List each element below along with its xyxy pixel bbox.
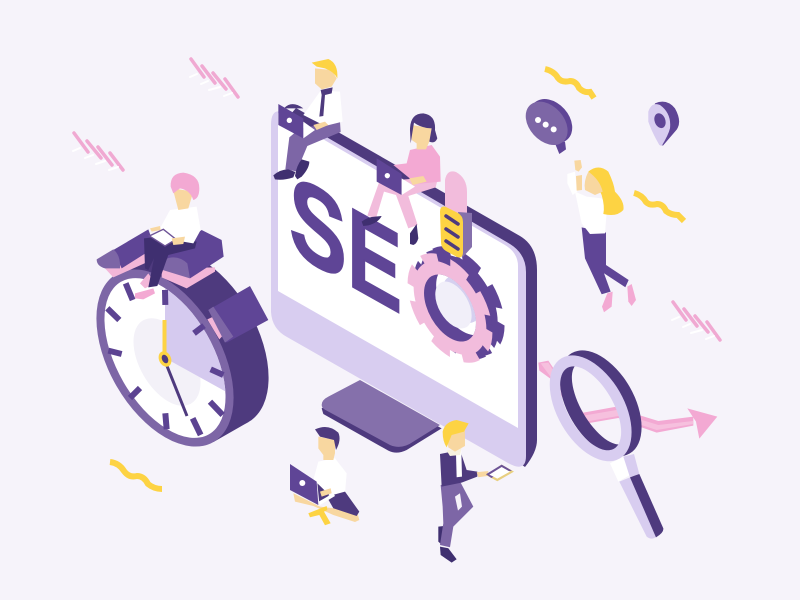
face (315, 68, 337, 89)
decoration: yellow squiggle top (545, 69, 594, 98)
shirt strip (456, 450, 462, 477)
hair (410, 113, 437, 143)
padlock stripes (446, 216, 458, 249)
tablet (486, 465, 514, 481)
monitor screen (278, 113, 518, 428)
person: man sitting cross-legged with laptop (290, 427, 359, 525)
legs (144, 237, 197, 287)
trousers (582, 227, 629, 294)
pin front (648, 104, 670, 146)
face (585, 172, 603, 195)
gear back (414, 230, 500, 378)
face (318, 437, 335, 460)
collar and tie (319, 87, 333, 117)
magnifier front rim (533, 341, 649, 475)
stopwatch rim (68, 246, 262, 470)
shirt (313, 458, 347, 497)
stopwatch (96, 229, 269, 446)
bubble front (517, 93, 576, 153)
collar (447, 447, 462, 456)
neck and face (412, 125, 432, 149)
gear as letter O (408, 246, 505, 363)
legs (367, 178, 437, 228)
hair (171, 173, 199, 200)
hair (312, 59, 337, 78)
laptop (278, 104, 303, 138)
shoe (440, 547, 457, 563)
laptop (290, 464, 318, 505)
person: blond man standing with tablet (438, 420, 514, 563)
arrow head (687, 408, 717, 439)
shoes (627, 284, 636, 306)
pin hole (652, 112, 668, 130)
shoes (273, 169, 295, 180)
hand (320, 488, 332, 497)
pale centre shadow (120, 307, 214, 417)
hand (477, 471, 488, 477)
decoration: pink dashes top (190, 59, 238, 97)
person: blond man with laptop on monitor (273, 59, 343, 180)
hands (574, 160, 582, 191)
padlock body (440, 207, 463, 257)
padlock side (458, 212, 472, 258)
yellow shoes (308, 506, 331, 525)
laptop keyboard (317, 483, 329, 503)
growth arrow (538, 361, 717, 439)
tick marks (107, 283, 223, 435)
shoes (135, 288, 155, 299)
laptop logo (287, 118, 292, 123)
monitor stand (322, 380, 442, 453)
bubble back (521, 91, 581, 151)
decoration: yellow squiggle right (634, 193, 684, 221)
hair (588, 167, 624, 215)
icon: speech bubble (517, 91, 581, 154)
hair (443, 420, 469, 447)
person: jumping blonde woman (567, 160, 636, 312)
stopwatch top crown (97, 229, 224, 288)
clock hands (156, 320, 187, 416)
shirt (303, 91, 343, 126)
hand (313, 122, 328, 130)
decoration: pink dashes left (73, 133, 123, 170)
shirt (160, 207, 201, 243)
laptop keyboard (303, 122, 315, 138)
gap between legs (455, 493, 462, 511)
hair (315, 427, 340, 450)
letter S: S (289, 148, 347, 307)
bubble tail (555, 142, 566, 154)
stopwatch face (79, 258, 251, 458)
shoes (362, 216, 382, 226)
arrow line (538, 361, 693, 433)
icon: location pin (648, 102, 679, 146)
shirt (575, 192, 607, 234)
monitor (271, 108, 537, 467)
magnifier handle (610, 454, 663, 539)
raised arm (567, 172, 577, 195)
top (393, 145, 441, 184)
magnifier back rim (543, 336, 659, 470)
monitor back edge (290, 108, 537, 467)
legs (440, 483, 473, 547)
jacket (440, 450, 477, 487)
neck and face (173, 188, 193, 210)
pin back (653, 102, 679, 146)
elapsed wedge (165, 288, 226, 392)
decoration: yellow squiggle bottom left (110, 462, 162, 489)
padlock shackle (445, 171, 467, 218)
hand (409, 176, 427, 185)
face (447, 430, 465, 452)
laptop logo (299, 480, 305, 486)
person: woman with laptop on monitor (362, 113, 441, 245)
hands (150, 226, 161, 232)
tablet (149, 229, 176, 246)
back leg (438, 526, 444, 545)
gear hole interior (435, 274, 476, 335)
stopwatch body (103, 226, 297, 450)
person: pink-haired reader on the stopwatch (135, 173, 201, 299)
laptop logo (385, 173, 390, 178)
legs (285, 122, 341, 171)
padlock (440, 171, 472, 258)
bubble dots (535, 117, 557, 132)
laptop keyboard (402, 178, 415, 195)
gear front ring (412, 242, 488, 374)
monitor frame (271, 111, 526, 467)
decoration: pink dashes right (672, 302, 720, 340)
dark hair behind laptop (284, 104, 303, 108)
stopwatch side button (207, 286, 268, 343)
laptop (377, 158, 402, 195)
magnifying glass (533, 336, 663, 539)
skirt (327, 492, 359, 516)
skin legs (293, 493, 359, 522)
SEO letters (289, 148, 402, 340)
letter E: E (347, 183, 402, 340)
